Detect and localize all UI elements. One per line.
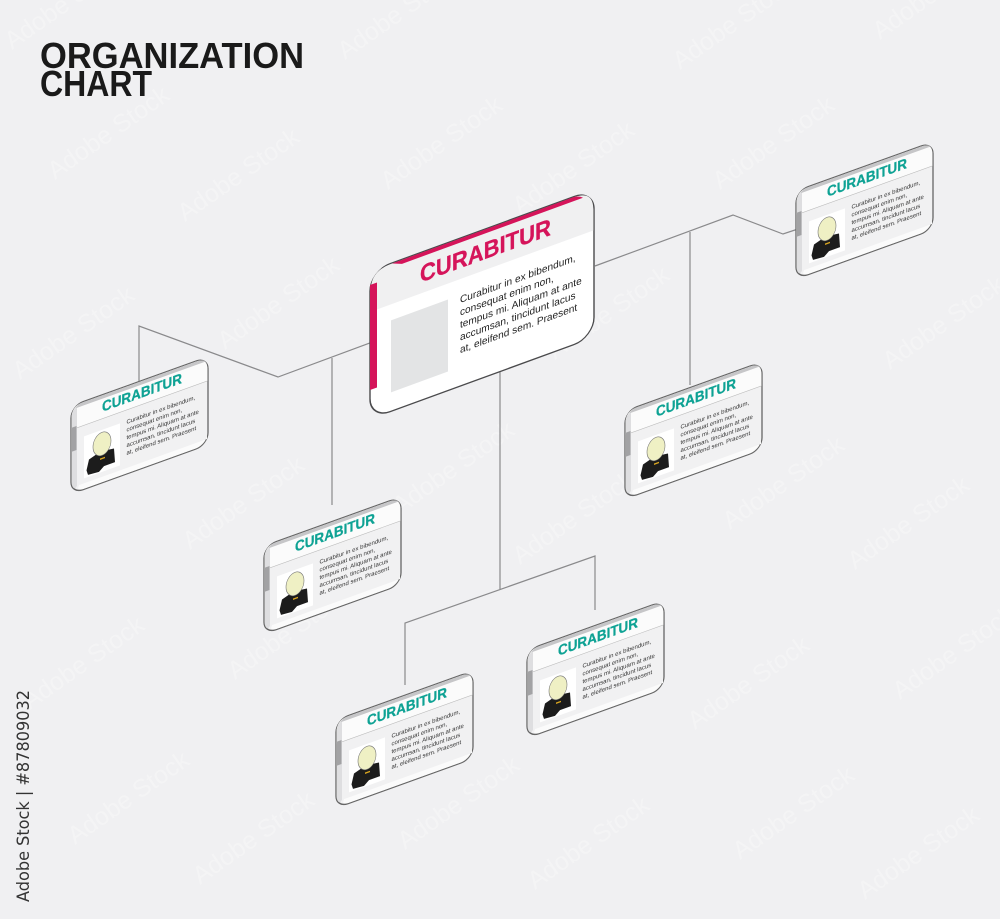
heading: CURABITUR (656, 375, 736, 421)
body text: Curabitur in ex bibendum, (126, 394, 195, 426)
body text: accumsan, tincidunt lacus (852, 203, 920, 234)
portrait icon (540, 667, 576, 722)
body text: tempus mi. Aliquam at ante (852, 193, 924, 226)
body text: at, eleifend sem. Praesent (392, 739, 461, 771)
text: Adobe Stock (187, 785, 320, 890)
text: Adobe Stock (682, 630, 815, 735)
text: Adobe Stock (842, 470, 975, 575)
body text: at, eleifend sem. Praesent (852, 210, 921, 242)
title (40, 35, 304, 104)
portrait icon (349, 737, 385, 792)
body text: tempus mi. Aliquam at ante (680, 413, 753, 446)
panel: card lower left (264, 497, 401, 634)
text: Adobe Stock (222, 580, 355, 685)
text: Adobe Stock (42, 80, 175, 185)
text: Adobe Stock (387, 415, 520, 520)
body text: tempus mi. Aliquam at ante (320, 548, 392, 581)
heading: CURABITUR (102, 370, 182, 416)
panel: card right middle (625, 362, 762, 499)
main card header band (371, 190, 593, 312)
body text: tempus mi. Aliquam at ante (392, 722, 464, 755)
text: Adobe Stock (177, 450, 310, 555)
main card image placeholder (391, 300, 448, 392)
text: Adobe Stock (375, 90, 508, 195)
connector lines (139, 215, 798, 685)
body text: accumsan, tincidunt lacus (582, 662, 651, 693)
title: ORGANIZATION (40, 35, 304, 76)
panel: main card (370, 189, 594, 419)
panel: card bottom right (527, 601, 664, 738)
main card body text: accumsan, tincidunt lacus (460, 291, 576, 344)
portrait icon (638, 428, 674, 483)
body text (680, 398, 753, 462)
body text: Curabitur in ex bibendum, (680, 399, 749, 431)
body text: accumsan, tincidunt lacus (680, 423, 749, 454)
body text: accumsan, tincidunt lacus (126, 418, 195, 449)
text: Adobe Stock (717, 430, 850, 535)
body text: at, eleifend sem. Praesent (320, 565, 389, 597)
main card body text (460, 251, 582, 356)
text: Adobe Stock (852, 800, 985, 905)
title: CHART (40, 63, 152, 104)
main card heading: CURABITUR (420, 215, 551, 289)
text: Adobe Stock (7, 280, 140, 385)
body text: accumsan, tincidunt lacus (320, 558, 388, 589)
body text: consequat enim non, (320, 547, 375, 574)
stock id label: Adobe Stock | #87809032 (14, 690, 34, 902)
body text: consequat enim non, (582, 651, 638, 678)
main card magenta top stripe (392, 194, 583, 267)
body text: Curabitur in ex bibendum, (852, 179, 920, 211)
portrait icon (809, 208, 845, 263)
body text: tempus mi. Aliquam at ante (126, 408, 199, 441)
text: Adobe Stock (392, 750, 525, 855)
text: Adobe Stock (62, 745, 195, 850)
body text: at, eleifend sem. Praesent (582, 669, 652, 701)
body text (392, 707, 464, 771)
main card body text: consequat enim non, (460, 274, 554, 319)
panel: card top right (796, 142, 933, 279)
text: Adobe Stock (17, 610, 150, 715)
main card body text: tempus mi. Aliquam at ante (460, 276, 582, 331)
panel: card left (71, 357, 208, 494)
body text: Curabitur in ex bibendum, (582, 638, 651, 670)
text: Adobe Stock (507, 115, 640, 220)
heading: CURABITUR (558, 614, 638, 660)
portrait icon (84, 423, 120, 478)
text: Adobe Stock (507, 465, 640, 570)
body text: at, eleifend sem. Praesent (680, 430, 750, 462)
body text (582, 637, 655, 701)
text: Adobe Stock (522, 790, 655, 895)
main card body text: at, eleifend sem. Praesent (460, 303, 577, 356)
heading: CURABITUR (295, 510, 375, 556)
text: Adobe Stock (542, 260, 675, 365)
text: Adobe Stock (707, 90, 840, 195)
text: Adobe Stock (212, 250, 345, 355)
text: Adobe Stock (172, 122, 305, 227)
body text: accumsan, tincidunt lacus (392, 732, 460, 763)
body text: consequat enim non, (852, 192, 907, 219)
body text: tempus mi. Aliquam at ante (582, 652, 655, 685)
body text: at, eleifend sem. Praesent (126, 425, 196, 457)
main card magenta side stripe (370, 282, 377, 390)
body text: consequat enim non, (680, 412, 736, 439)
body text: Curabitur in ex bibendum, (320, 534, 388, 566)
body text (320, 533, 392, 597)
body text (126, 393, 199, 457)
portrait icon (277, 563, 313, 618)
body text: consequat enim non, (126, 407, 182, 434)
body text: consequat enim non, (392, 721, 447, 748)
heading: CURABITUR (827, 155, 907, 201)
text: Adobe Stock (727, 760, 860, 865)
main card body text: Curabitur in ex bibendum, (460, 253, 576, 306)
body text: Curabitur in ex bibendum, (392, 708, 460, 740)
panel: card bottom left (336, 671, 473, 808)
heading: CURABITUR (367, 684, 447, 730)
body text (852, 178, 924, 242)
